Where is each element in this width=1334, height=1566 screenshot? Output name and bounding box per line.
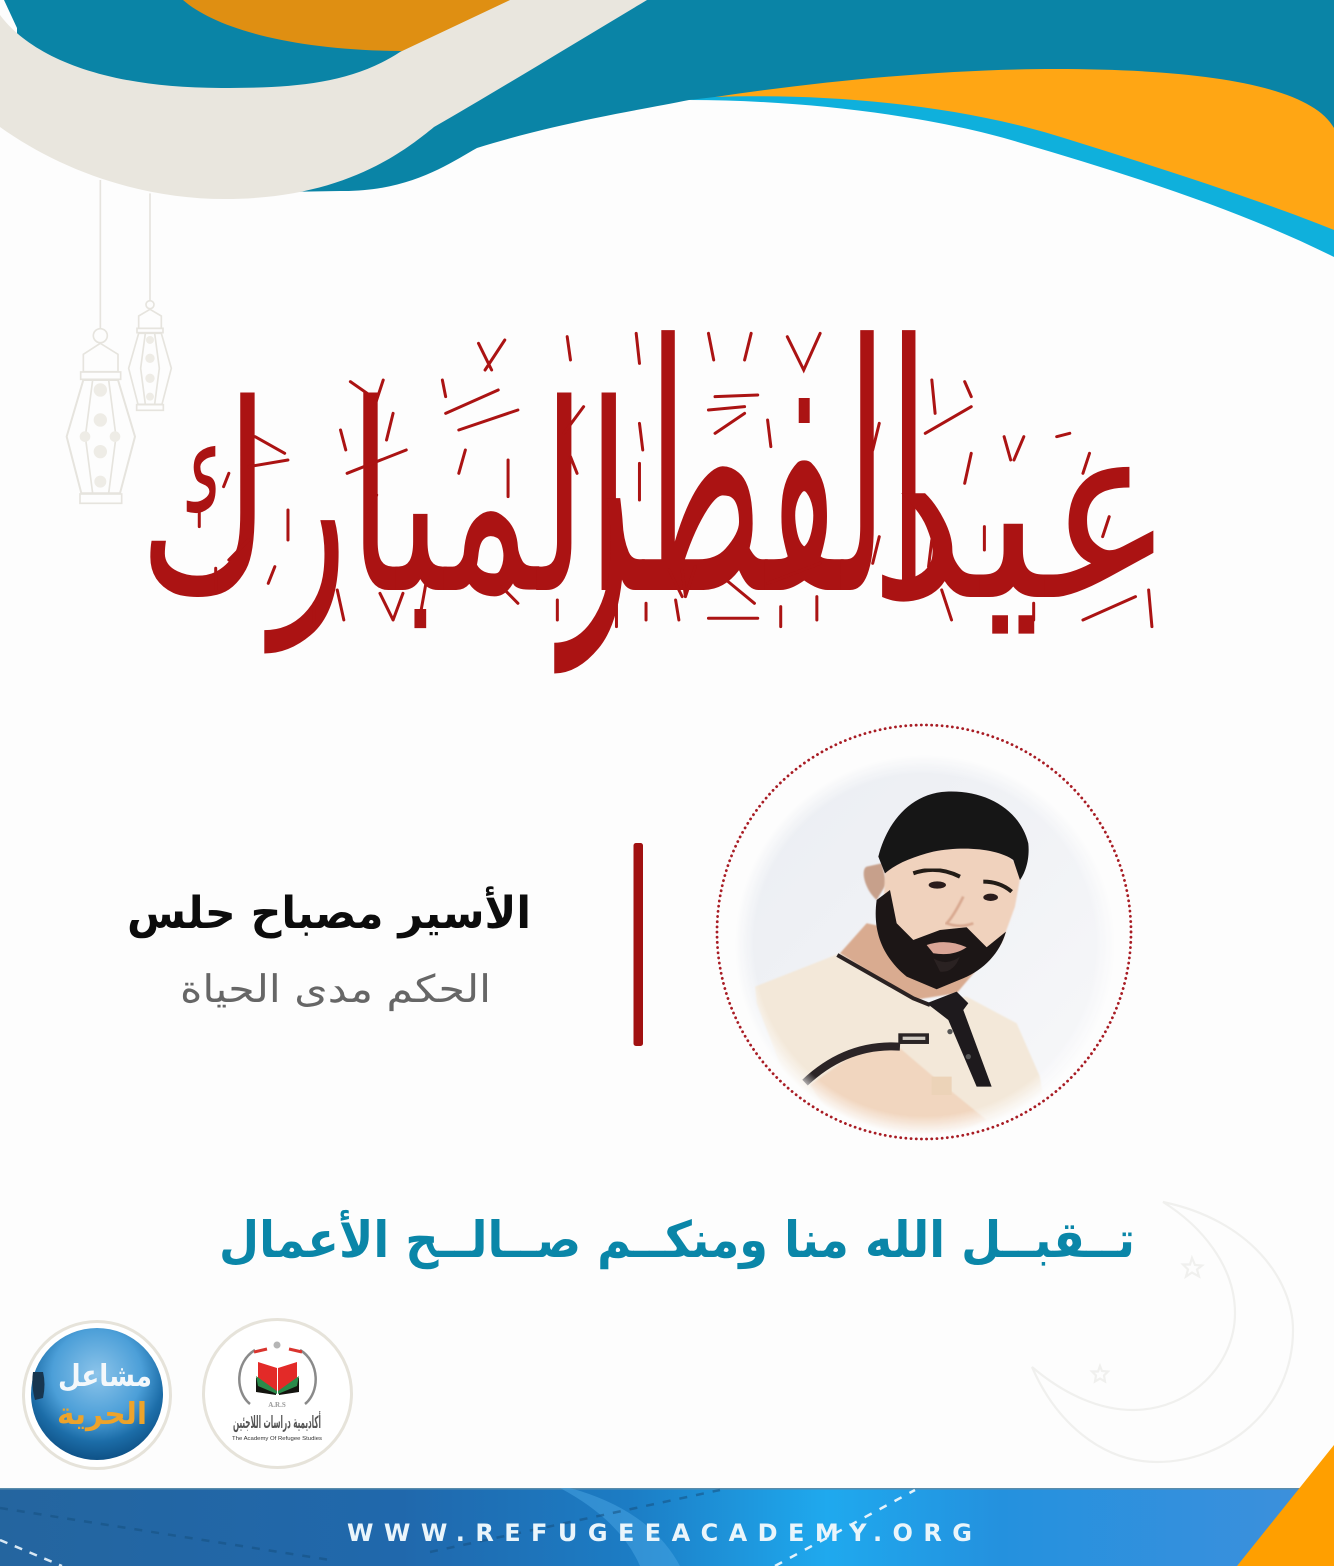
word: al-Mubarak: المبارك [139,349,631,654]
photo: bearded man [745,765,1098,1132]
logo: Academy of Refugee Studies: A.R.S [268,1401,286,1409]
arm [811,1048,984,1129]
shirt [755,953,1041,1119]
top wave banner [0,0,1334,257]
decorative diacritic ticks [199,333,1152,627]
icon: hanging lanterns [67,180,171,503]
logo: Academy of Refugee Studies: أكاديمية دراسات اللاجئين [233,1411,321,1433]
word: al-Fitr: الفطر [553,274,930,675]
orange wave [715,69,1334,230]
shirt badge [898,1033,929,1044]
sentence text: الحكم مدى الحياة [180,967,491,1012]
beard [876,890,1006,989]
face [884,848,1020,948]
pocket patch [932,1076,952,1092]
logo: Academy of Refugee Studies [204,1320,352,1468]
icon: crescent moon [1032,1202,1293,1462]
orange corner [1237,1445,1334,1566]
logo: Academy of Refugee Studies: The Academy Of Refugee Studies [232,1436,322,1442]
footer bar [0,1445,1334,1566]
cream wave [0,0,647,199]
portrait circle [717,725,1131,1143]
wreath [239,1350,316,1404]
eyebrows and eyes [913,870,1012,892]
logo: Mashael al-Hurriya: مشاعل [58,1359,152,1394]
word: Eid: عيد [869,365,1175,656]
name heading: الأسير مصباح حلس [127,886,531,939]
light blue ribbon [689,90,1334,257]
collar and placket [837,955,930,1005]
neck [840,923,993,1000]
logo: Mashael al-Hurriya: الحرية [57,1397,147,1432]
lips [927,942,967,954]
ear [864,863,887,900]
teal wave [4,0,1334,192]
slogan: تــقبــل الله منا ومنكــم صــالــح الأعمال [219,1209,1135,1270]
dotted ring [717,725,1131,1139]
website url: WWW.REFUGEEACADEMY.ORG [347,1519,972,1547]
hair [878,792,1029,880]
divider bar [634,843,643,1046]
book [258,1362,297,1392]
chin patch [933,957,960,972]
title calligraphy: Eid al-Fitr al-Mubarak [139,274,1175,675]
logo: Mashael al-Hurriya [24,1322,170,1468]
nose shadow [947,897,973,926]
sleeve stripe [805,1046,900,1083]
dark orange wave [183,0,530,60]
